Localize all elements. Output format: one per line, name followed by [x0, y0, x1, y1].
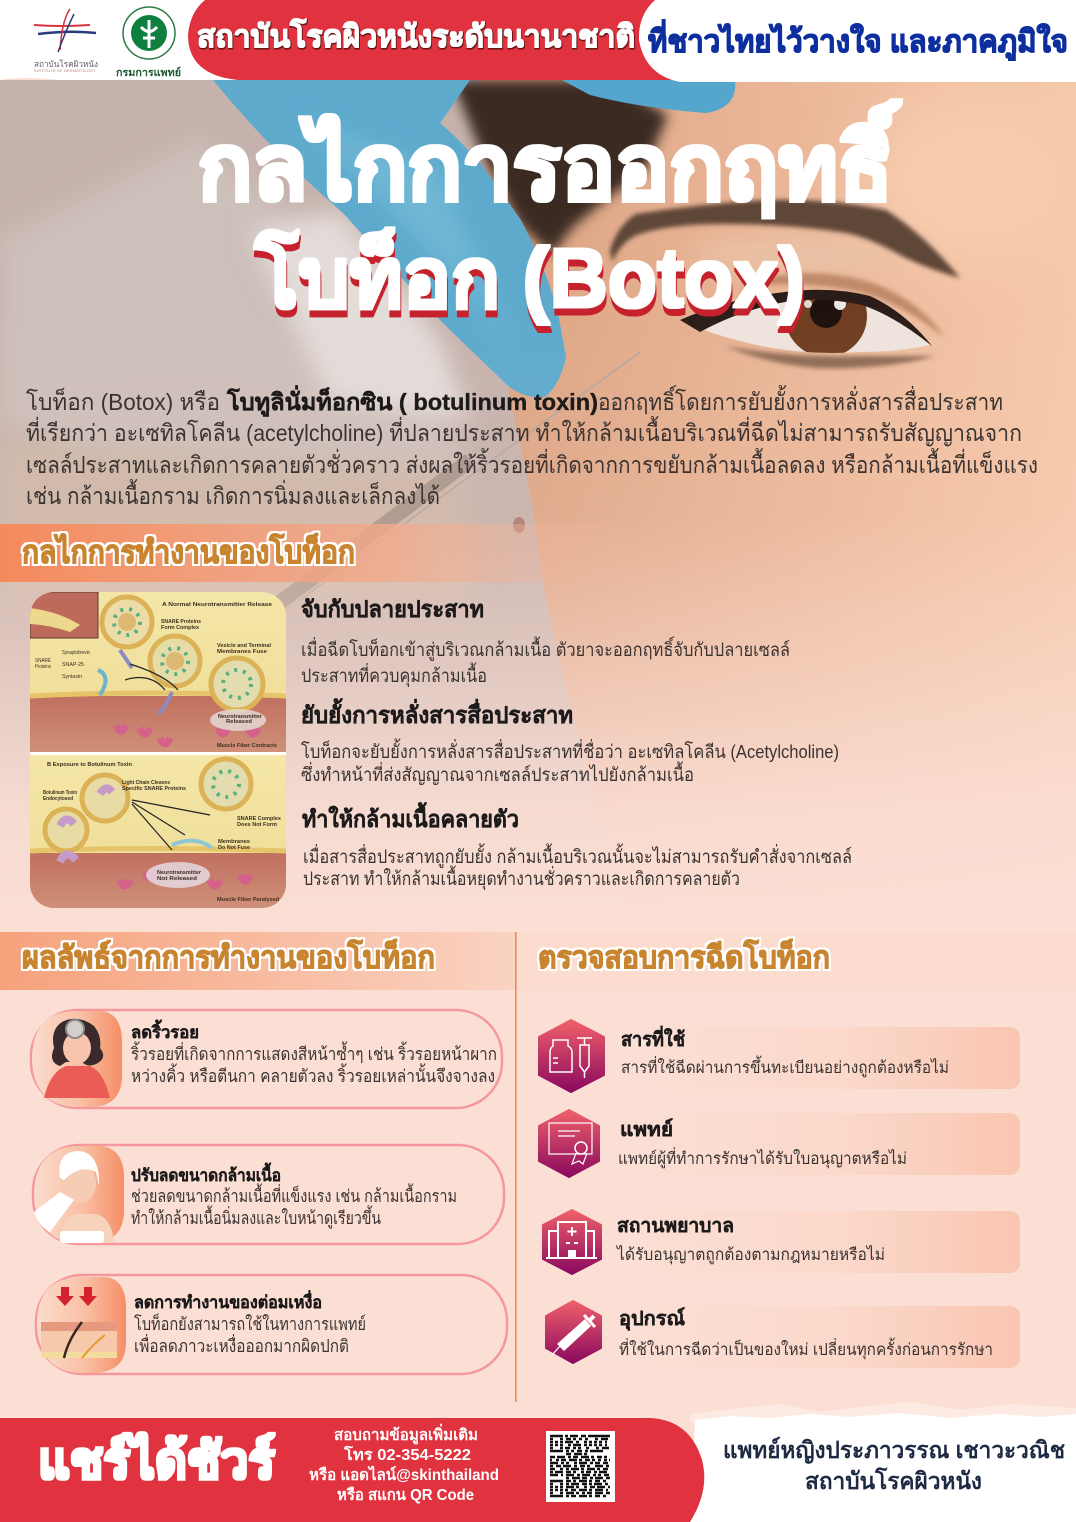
- check item: doctor: [539, 1110, 1020, 1177]
- card: reduce sweat glands: โบท็อกยังสามารถใช้ในทางการแพทย์: [134, 1313, 366, 1334]
- contact info: หรือ สแกน QR Code: [337, 1486, 474, 1504]
- check item: substance: [539, 1020, 1020, 1092]
- eyelid crease: [740, 273, 945, 338]
- diagram panel A: SNARE: [35, 658, 51, 664]
- diagram panel B: Membranes: [218, 839, 250, 845]
- card: reduce sweat glands: ลดการทำงานของต่อมเหงื่อ: [134, 1290, 322, 1312]
- hair: [452, 80, 668, 255]
- ear stud: [513, 517, 525, 533]
- intro paragraph: เช่น กล้ามเนื้อกราม เกิดการนิ่มลงและเล็กลงได้: [26, 479, 440, 509]
- diagram panel A: Neurotransmitter: [218, 714, 263, 720]
- QR code: [546, 1431, 615, 1502]
- logo: Institute of Dermatology: สถาบันโรคผิวหนัง: [34, 59, 98, 69]
- diagram panel A: SNARE Proteins: [161, 619, 201, 625]
- diagram panel B: Does Not Form: [237, 822, 277, 828]
- section heading: mechanism: [0, 524, 640, 582]
- section heading: check before injection: [516, 932, 1076, 990]
- title: [198, 99, 902, 325]
- check item: hospital: สถานพยาบาล: [617, 1215, 734, 1237]
- diagram panel B: B Exposure to Botulinum Toxin: [47, 762, 133, 768]
- diagram panel B: Not Released: [157, 876, 197, 882]
- contact info: โทร 02-354-5222: [343, 1445, 471, 1464]
- section heading: check before injection: ตรวจสอบการฉีดโบท็อก: [538, 938, 830, 975]
- intro paragraph: โบทูลินั่มท็อกซิน ( botulinum toxin): [226, 385, 598, 417]
- card: reduce muscle size: [33, 1145, 504, 1244]
- intro paragraph: [26, 384, 1038, 509]
- card: reduce muscle size: ช่วยลดขนาดกล้ามเนื้อที่แข็งแรง เช่น กล้ามเนื้อกราม: [131, 1183, 457, 1206]
- icon: vial and syringe: [539, 1020, 604, 1092]
- mechanism step 3: ประสาท ทำให้กล้ามเนื้อหยุดทำงานชั่วคราวและเกิดการคลายตัว: [303, 865, 740, 891]
- check item: equipment: [546, 1301, 1020, 1368]
- card: reduce muscle size: ทำให้กล้ามเนื้อนิ่มลงและใบหน้าดูเรียวขึ้น: [131, 1205, 381, 1229]
- footer: [0, 1402, 1076, 1522]
- section heading: mechanism: กลไกการทำงานของโบท็อก: [22, 532, 355, 570]
- upper glove finger: [562, 80, 735, 113]
- mechanism step 3: [302, 802, 852, 891]
- diagram panel A: Membranes Fuse: [217, 649, 267, 655]
- face skin: [480, 80, 1076, 788]
- card: reduce wrinkles: [31, 1010, 502, 1108]
- check item: hospital: [543, 1210, 1020, 1274]
- credit: แพทย์หญิงประภาวรรณ เชาวะวณิช: [723, 1437, 1065, 1464]
- diagram panel A: Synaptobrevin: [62, 650, 90, 656]
- diagram panel A: Form Complex: [161, 625, 200, 631]
- diagram panel B: Botulinum Toxin: [43, 790, 77, 796]
- card: reduce sweat glands: [36, 1275, 507, 1374]
- main glove: [213, 80, 566, 397]
- card: reduce sweat glands: เพื่อลดภาวะเหงื่อออกมากผิดปกติ: [134, 1334, 349, 1356]
- share headline: แชร์ได้ชัวร์: [38, 1432, 275, 1489]
- check item: substance: สารที่ใช้ฉีดผ่านการขึ้นทะเบียนอย่างถูกต้องหรือไม่: [621, 1055, 949, 1078]
- header: red banner: [188, 0, 700, 80]
- diagram: botulinum toxin mechanism: [30, 592, 286, 908]
- header: white logo area: [0, 0, 240, 80]
- diagram panel A: A Normal Neurotransmitter Release: [162, 602, 272, 608]
- check item: equipment: อุปกรณ์: [619, 1307, 685, 1331]
- contact info: หรือ แอดไลน์@skinthailand: [309, 1465, 499, 1484]
- header bar: [0, 0, 1076, 82]
- check item: doctor: แพทย์: [620, 1118, 673, 1141]
- mechanism step 1: จับกับปลายประสาท: [301, 596, 484, 622]
- diagram panel A: Muscle Fiber Contracts: [217, 743, 277, 749]
- title line 2: โบท็อก (Botox): [254, 227, 805, 325]
- mechanism step 3: ทำให้กล้ามเนื้อคลายตัว: [302, 802, 519, 832]
- contact info: [309, 1423, 499, 1504]
- credit: [723, 1437, 1065, 1494]
- diagram panel B: Light Chain Cleaves: [122, 780, 170, 786]
- mechanism step 2: ยับยั้งการหลั่งสารสื่อประสาท: [301, 698, 573, 728]
- icon: certificate: [539, 1110, 599, 1177]
- check item: substance: สารที่ใช้: [621, 1025, 685, 1051]
- diagram panel A: Released: [226, 719, 252, 725]
- contact info: สอบถามข้อมูลเพิ่มเติม: [334, 1423, 478, 1446]
- icon: woman with wrinkles: [32, 1011, 122, 1107]
- card: reduce wrinkles: หว่างคิ้ว หรือตีนกา คลายตัวลง ริ้วรอยเหล่านั้นจึงจางลง: [131, 1063, 495, 1086]
- syringe: [300, 352, 640, 600]
- logo: Department of Medical Services: กรมการแพทย์: [116, 66, 181, 79]
- diagram panel B: Specific SNARE Proteins: [122, 786, 186, 792]
- mechanism step 3: เมื่อสารสื่อประสาทถูกยับยั้ง กล้ามเนื้อบริเวณนั้นจะไม่สามารถรับคำสั่งจากเซลล์: [303, 843, 852, 868]
- eye: [704, 300, 930, 353]
- card: reduce wrinkles: ริ้วรอยที่เกิดจากการแสดงสีหน้าซ้ำๆ เช่น ริ้วรอยหน้าผาก: [130, 1041, 497, 1064]
- icon: skin cross-section with arrows: [37, 1277, 126, 1373]
- mechanism step 1: เมื่อฉีดโบท็อกเข้าสู่บริเวณกล้ามเนื้อ ตัวยาจะออกฤทธิ์จับกับปลายเซลล์: [301, 636, 790, 661]
- intro paragraph: โบท็อก (Botox) หรือ: [26, 387, 220, 415]
- fade to peach: [0, 515, 1076, 925]
- icon: syringe: [546, 1301, 601, 1363]
- mechanism step 2: โบท็อกจะยับยั้งการหลั่งสารสื่อประสาทที่ชื่อว่า อะเซทิลโคลีน (Acetylcholine): [301, 738, 839, 762]
- mechanism step 1: ประสาทที่ควบคุมกล้ามเนื้อ: [301, 662, 487, 688]
- card: reduce wrinkles: ลดริ้วรอย: [131, 1019, 199, 1042]
- logo: Institute of Dermatology: [34, 9, 98, 73]
- diagram panel A: Proteins: [35, 664, 51, 670]
- diagram panel B: Muscle Fiber Paralyzed: [217, 897, 279, 903]
- eyebrow: [610, 200, 960, 278]
- header text: red banner: สถาบันโรคผิวหนังระดับนานาชาติ: [197, 18, 635, 54]
- check item: equipment: ที่ใช้ในการฉีดว่าเป็นของใหม่ เปลี่ยนทุกครั้งก่อนการรักษา: [619, 1337, 993, 1360]
- mechanism step 2: [301, 698, 839, 786]
- mechanism step 2: ซึ่งทำหน้าที่ส่งสัญญาณจากเซลล์ประสาทไปยังกล้ามเนื้อ: [301, 761, 694, 786]
- title line 1: กลไกการออกฤทธิ์: [198, 99, 902, 219]
- logo: Institute of Dermatology: INSTITUTE OF DERMATOLOGY: [34, 68, 96, 73]
- credit: สถาบันโรคผิวหนัง: [805, 1467, 982, 1494]
- footer: white brush panel: [690, 1402, 1076, 1522]
- diagram panel B: SNARE Complex: [237, 816, 282, 822]
- card: reduce muscle size: ปรับลดขนาดกล้ามเนื้อ: [131, 1162, 281, 1185]
- logo: Department of Medical Services: [116, 7, 181, 79]
- diagram panel B: [30, 755, 286, 908]
- diagram panel A: Vesicle and Terminal: [217, 643, 271, 649]
- icon: woman with towel: [34, 1146, 124, 1243]
- diagram panel A: Syntaxin: [62, 674, 82, 680]
- header: white banner: [639, 0, 1076, 82]
- icon: hospital building: [543, 1210, 601, 1274]
- diagram panel A: [30, 592, 286, 752]
- diagram panel B: Endocytosed: [43, 796, 73, 802]
- check item: hospital: ได้รับอนุญาตถูกต้องตามกฎหมายหรือไม่: [615, 1245, 885, 1265]
- section heading: results: [0, 932, 515, 990]
- mechanism step 1: [301, 596, 790, 688]
- diagram panel B: Do Not Fuse: [218, 845, 250, 851]
- check item: doctor: แพทย์ผู้ที่ทำการรักษาได้รับใบอนุญาตหรือไม่: [618, 1147, 907, 1169]
- background photo: gloved hand injecting face: [0, 80, 1076, 808]
- footer: red panel: [0, 1418, 704, 1522]
- diagram panel B: Neurotransmitter: [157, 870, 202, 876]
- section heading: results: ผลลัพธ์จากการทำงานของโบท็อก: [22, 938, 435, 975]
- diagram panel A: SNAP-25: [62, 662, 84, 668]
- intro paragraph: ออกฤทธิ์โดยการยับยั้งการหลั่งสารสื่อประสาท: [598, 384, 1003, 415]
